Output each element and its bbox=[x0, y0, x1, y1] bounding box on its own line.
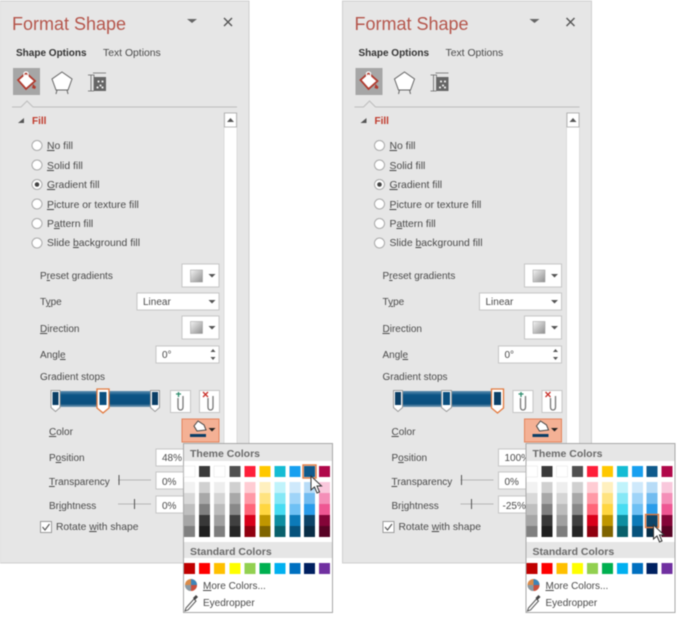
gradient setting labels: Gradient stops bbox=[40, 372, 105, 383]
fill type radio labels: Pattern fill bbox=[47, 219, 93, 230]
gradient setting labels: Position bbox=[392, 453, 427, 464]
gradient setting labels: Position bbox=[49, 453, 85, 464]
stop values: 100% bbox=[504, 453, 530, 464]
panel: right Format Shape pane bbox=[342, 1, 675, 612]
menu items: More Colors... bbox=[546, 581, 608, 592]
mouse cursor bbox=[311, 476, 322, 493]
fill type radio labels: No fill bbox=[390, 141, 416, 152]
gradient setting labels: 0° bbox=[162, 350, 172, 361]
gradient setting labels: Rotate with shape bbox=[398, 522, 481, 533]
gradient setting labels: Direction bbox=[40, 324, 79, 335]
gradient setting labels: Color bbox=[49, 427, 74, 438]
tab labels: Text Options bbox=[103, 48, 161, 59]
fill type radio labels: Slide background fill bbox=[390, 238, 483, 249]
section heading: Fill: Fill bbox=[32, 116, 47, 127]
menu items bbox=[203, 581, 266, 609]
gradient setting labels: Brightness bbox=[49, 501, 96, 512]
stop values: 48% bbox=[162, 453, 182, 464]
fill type radio labels bbox=[47, 141, 140, 249]
colour picker popup bbox=[526, 444, 675, 612]
colour picker popup bbox=[184, 444, 332, 612]
menu items bbox=[546, 581, 608, 609]
gradient setting labels: Gradient stops bbox=[382, 372, 448, 383]
tab labels: Shape Options bbox=[16, 48, 87, 59]
gradient setting labels: Preset gradients bbox=[382, 271, 455, 282]
gradient setting labels: Angle bbox=[382, 350, 409, 361]
stop values: 0% bbox=[504, 477, 519, 488]
fill type radio labels: Picture or texture fill bbox=[390, 200, 481, 211]
title: Format Shape: Format Shape bbox=[354, 14, 469, 34]
tab labels: Shape Options bbox=[358, 48, 430, 59]
fill type radio labels: Solid fill bbox=[390, 161, 425, 172]
selected swatch outline bbox=[646, 514, 658, 528]
fill type radio labels bbox=[390, 141, 483, 249]
stop values: -25% bbox=[502, 501, 526, 512]
tab labels: Text Options bbox=[446, 48, 503, 59]
menu items: More Colors... bbox=[203, 581, 266, 592]
gradient setting labels: Transparency bbox=[392, 477, 452, 488]
gradient setting labels: Transparency bbox=[49, 477, 110, 488]
fill type radio labels: Pattern fill bbox=[390, 219, 436, 230]
menu items: Eyedropper bbox=[203, 598, 255, 609]
stop values bbox=[162, 453, 182, 512]
gradient setting labels: Type bbox=[40, 297, 62, 308]
stop values: 0% bbox=[162, 501, 177, 512]
gradient setting labels bbox=[382, 271, 514, 533]
gradient setting labels: Preset gradients bbox=[40, 271, 113, 282]
gradient setting labels: Linear bbox=[143, 297, 171, 308]
selected swatch outline bbox=[303, 465, 316, 478]
gradient setting labels: Rotate with shape bbox=[56, 522, 139, 533]
gradient setting labels: Type bbox=[382, 297, 405, 308]
gradient setting labels: Direction bbox=[382, 324, 422, 335]
fill type radio labels: Picture or texture fill bbox=[47, 200, 139, 211]
popup heading: Theme Colors: Theme Colors bbox=[532, 448, 603, 460]
fill type radio labels: Gradient fill bbox=[47, 180, 100, 191]
gradient setting labels: Angle bbox=[40, 350, 66, 361]
gradient setting labels: Brightness bbox=[392, 501, 439, 512]
menu items: Eyedropper bbox=[546, 598, 598, 609]
stop values bbox=[502, 453, 530, 512]
colour swatches bbox=[184, 466, 330, 574]
fill type radio labels: Gradient fill bbox=[390, 180, 442, 191]
tab labels bbox=[16, 48, 161, 59]
popup heading: Standard Colors: Standard Colors bbox=[190, 546, 272, 558]
fill type radio labels: Solid fill bbox=[47, 161, 83, 172]
gradient setting labels: Color bbox=[392, 427, 416, 438]
popup heading: Theme Colors: Theme Colors bbox=[190, 448, 260, 460]
tab labels bbox=[358, 48, 503, 59]
gradient stops: middle selected bbox=[51, 389, 160, 413]
fill type radio labels: Slide background fill bbox=[47, 238, 140, 249]
panel: left Format Shape pane bbox=[0, 1, 332, 612]
slider ticks bbox=[119, 475, 134, 509]
section heading: Fill: Fill bbox=[374, 116, 389, 127]
slider ticks bbox=[462, 475, 472, 509]
fill type radio labels: No fill bbox=[47, 141, 73, 152]
gradient setting labels bbox=[40, 271, 172, 533]
colour swatches bbox=[526, 466, 672, 574]
gradient stops: last selected bbox=[394, 389, 504, 413]
popup heading: Standard Colors: Standard Colors bbox=[532, 546, 614, 558]
title: Format Shape: Format Shape bbox=[12, 14, 126, 34]
gradient setting labels: 0° bbox=[504, 350, 514, 361]
stop values: 0% bbox=[162, 477, 177, 488]
gradient setting labels: Linear bbox=[486, 297, 514, 308]
mouse cursor bbox=[654, 525, 664, 542]
